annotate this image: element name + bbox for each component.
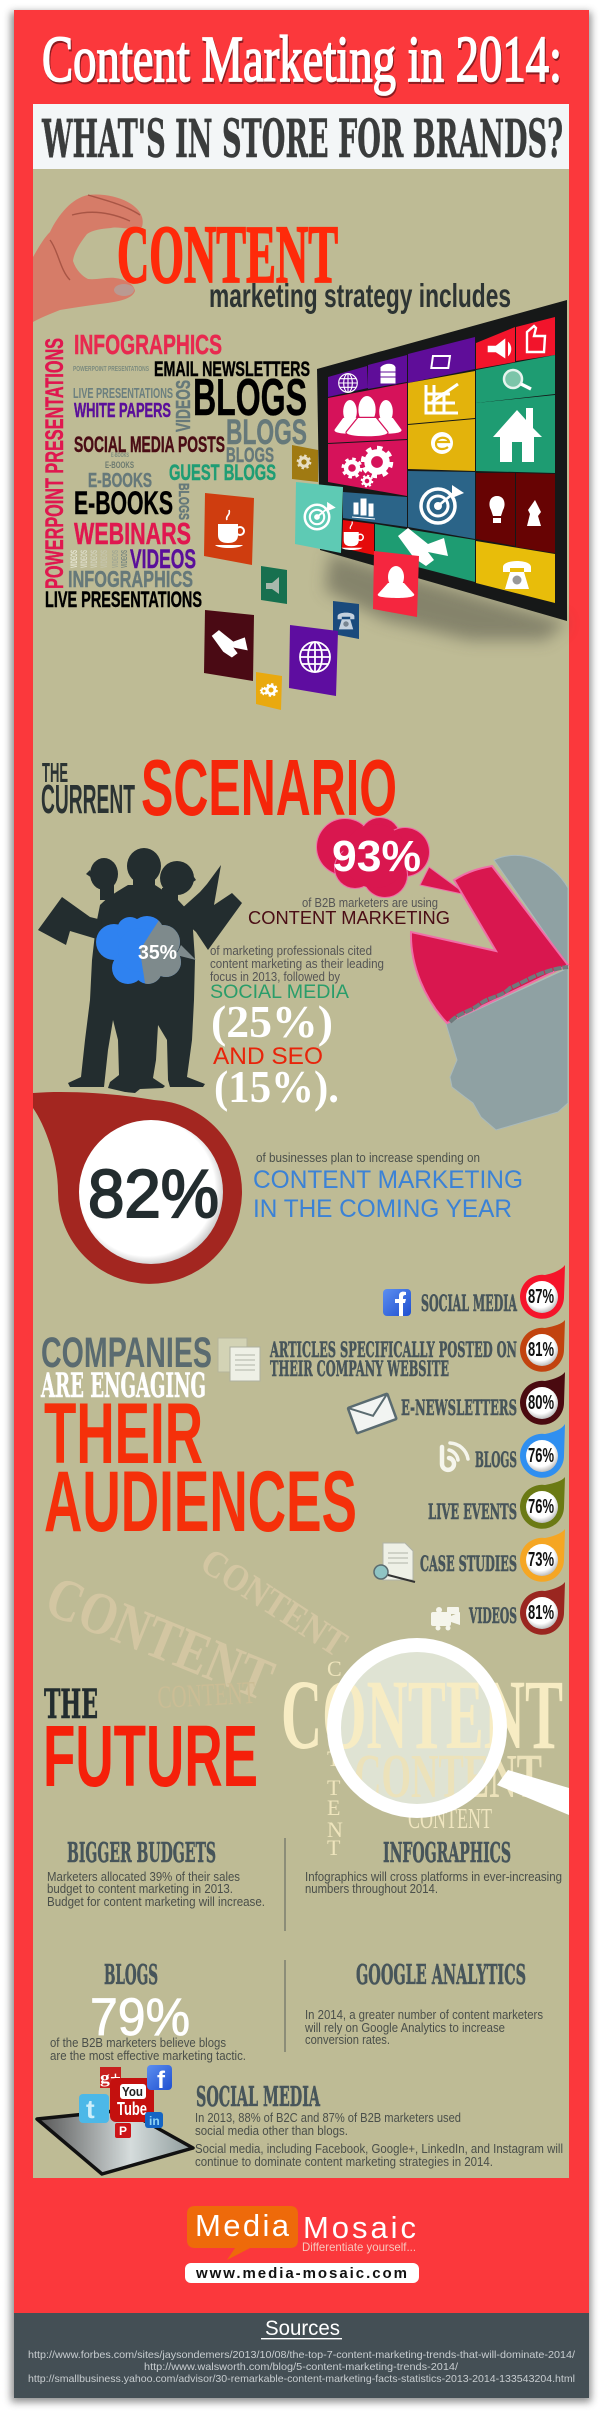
watermark words: T [327,1746,341,1771]
word cloud: WEBINARS [74,516,191,551]
word cloud: VIDEOS [79,550,89,568]
watermark words: E [327,1795,340,1820]
block: blogs [50,1960,246,2063]
block: blogs: BLOGS [104,1960,158,1991]
word cloud: LIVE PRESENTATIONS [73,385,173,402]
word cloud: VIDEOS [89,550,99,568]
icon: podium [352,499,375,519]
block: infographics [305,1838,562,1896]
icon: envelope [348,1394,397,1433]
icon: youtube: Tube [117,2099,147,2119]
text: leading focus: (15%). [214,1061,339,1112]
watermark words: N [327,1817,343,1842]
heading: companies are engaging their audiences: THEIR [44,1386,203,1482]
word cloud: INFOGRAPHICS [74,329,222,360]
block: bigger budgets [47,1838,265,1909]
word cloud: WHITE PAPERS [74,400,171,422]
word cloud: GUEST BLOGS [169,460,276,485]
monitor with tiles [317,300,567,621]
word cloud: BLOGS [226,444,274,467]
block: infographics: numbers throughout 2014. [305,1881,438,1896]
heading: companies are engaging their audiences [40,1329,357,1550]
watermark words: CONTENT [408,1804,492,1835]
row: blogs 76%: BLOGS [475,1447,517,1472]
icon: handshake [398,528,448,566]
watermark words: T [327,1835,341,1860]
text: B2B marketers: of B2B marketers are using [302,896,438,910]
row: social media 87%: 87% [528,1286,554,1308]
text: B2B marketers: CONTENT MARKETING [248,907,450,928]
row: live events 76% [428,1477,565,1529]
word cloud: SOCIAL MEDIA POSTS [74,432,225,457]
source links [28,2349,575,2385]
block: bigger budgets: BIGGER BUDGETS [67,1838,216,1869]
heading: companies are engaging their audiences: ARE ENGAGING [40,1366,206,1406]
text: spending [253,1150,523,1223]
block: bigger budgets: Marketers allocated 39% of their sales [47,1869,240,1884]
icon: gears [343,448,391,486]
icon: facebook [147,2065,172,2094]
watermark words [37,1540,563,1860]
text: spending: IN THE COMING YEAR [253,1195,512,1223]
icon: window [431,356,450,368]
icon: bulb [489,496,505,523]
head with pie chart [411,855,568,1130]
block: google analytics: conversion rates. [305,2032,390,2047]
subtitle banner [33,104,569,170]
block: google analytics [304,1960,543,2047]
drop: 82% [33,1092,242,1284]
illustration: tablet with social icons [37,2065,193,2174]
row: videos 81%: VIDEOS [468,1603,517,1628]
icon: twitter: t [86,2094,95,2124]
section: content intro [33,195,511,322]
block: social media: In 2013, 88% of B2C and 87% of B2B marketers used [195,2110,461,2125]
watermark words: CONTENT [193,1540,354,1665]
icon: cup [342,522,363,550]
icon: documents [218,1338,260,1381]
word cloud: E-BOOKS [88,470,152,492]
word cloud: EMAIL NEWSLETTERS [154,358,310,381]
word cloud: VIDEOS [120,550,129,568]
magnifying glass frame [334,1645,569,1815]
row: case studies 73% [374,1529,565,1582]
icon: chess knight [527,500,541,526]
block: social media [195,2082,563,2169]
logo: media mosaic: www.media-mosaic.com [195,2265,407,2282]
row: blogs 76% [442,1424,565,1478]
block: blogs: of the B2B marketers believe blogs [50,2035,226,2050]
word cloud: BLOGS [226,413,307,452]
cloud: 35% [96,916,196,984]
icon: speaker [488,339,511,358]
logo: media mosaic: Mosaic [303,2210,416,2245]
block: social media: SOCIAL MEDIA [196,2082,321,2113]
block: blogs: are the most effective marketing tactic. [50,2048,246,2063]
block: infographics: Infographics will cross platforms in ever-increasing [305,1869,562,1884]
logo: media mosaic: Media [195,2208,290,2243]
word cloud: E-BOOKS [111,453,129,459]
heading: the future: THE [44,1681,98,1728]
word cloud: E-BOOKS [105,460,134,470]
icon: magnifier [504,370,531,389]
word cloud: BLOGS [175,483,192,520]
text: leading focus: (25%) [211,996,333,1047]
row: e-newsletters 80%: 80% [528,1392,554,1414]
text: leading focus: AND SEO [213,1043,323,1070]
block: bigger budgets: Budget for content marketing will increase. [47,1894,265,1909]
heading: companies are engaging their audiences: AUDIENCES [44,1454,357,1550]
icon: target [421,485,464,523]
panel: sources [14,2313,589,2398]
bubble: 93% [317,818,467,897]
row: case studies 73%: CASE STUDIES [420,1551,517,1576]
monitor shadow [325,553,567,640]
block: blogs: 79% [90,1988,190,2047]
icon: video camera [431,1607,460,1630]
source links: http://www.forbes.com/sites/jaysondemers/2013/10/08/the-top-7-content-marketing-trends-that-will-dominate-2014/ [28,2349,575,2361]
word cloud: VIDEOS [111,550,120,568]
word cloud: INFOGRAPHICS [68,566,193,592]
row: videos 81%: 81% [528,1602,554,1624]
row: articles 81%: 81% [528,1339,554,1361]
text: spending: CONTENT MARKETING [253,1166,523,1194]
icon: people [334,395,402,437]
word cloud: VIDEOS [173,380,195,432]
logo: media mosaic: Differentiate yourself... [302,2240,416,2254]
row: social media 87% [383,1265,565,1319]
text: leading focus: of marketing professionals cited [210,944,372,958]
magnifier lens [339,1650,495,1806]
icon: linkedin [145,2112,163,2128]
block: google analytics: In 2014, a greater number of content marketers [305,2007,543,2022]
block: social media: continue to dominate content marketing strategies in 2014. [195,2154,493,2169]
icon: stacked device [380,363,396,384]
heading: the future: FUTURE [43,1708,258,1805]
icon: pinterest [115,2123,131,2138]
icon: document with magnifier [374,1543,415,1582]
word cloud: E-BOOKS [74,485,173,521]
row: e-newsletters 80% [348,1372,565,1433]
heading: CONTENT: CONTENT [117,208,338,300]
icon: letter e [431,432,453,454]
text: spending: of businesses plan to increase spending on [256,1150,480,1165]
cloud: 35%: 35% [138,942,177,964]
row: live events 76%: LIVE EVENTS [428,1499,517,1524]
text: leading focus [210,944,384,1112]
heading: companies are engaging their audiences: COMPANIES [41,1329,212,1377]
block: google analytics: will rely on Google Analytics to increase [304,2020,505,2035]
text: leading focus: SOCIAL MEDIA [210,982,349,1003]
icon: blog feed [442,1443,468,1470]
word cloud: BLOGS [193,369,307,427]
icon: linkedin: in [149,2114,160,2128]
text: leading focus: content marketing as their leading [210,957,384,971]
icon: small globe [339,374,357,392]
icon: facebook [383,1289,411,1316]
word cloud [41,329,310,612]
word cloud: VIDEOS [99,550,109,568]
icon: hand [33,195,143,322]
icon: telephone [503,561,531,589]
word cloud: VIDEOS [130,544,196,574]
word cloud: POWERPOINT PRESENTATIONS [73,366,149,373]
block: bigger budgets: budget to content marketing in 2013. [47,1881,233,1896]
icon: chart cart [426,384,458,413]
icon: youtube: You [122,2084,143,2099]
word cloud: VIDEOS [69,550,79,568]
beige content panel [33,169,569,2178]
logo: media mosaic [185,2206,419,2283]
silhouette: three men [38,848,242,1093]
source links: http://www.walsworth.com/blog/5-content-marketing-trends-2014/ [144,2361,458,2373]
row: articles 81% [218,1320,565,1381]
floating tiles [204,445,419,710]
row: live events 76%: 76% [528,1496,554,1518]
drop: 82%: 82% [88,1156,219,1232]
word cloud: LIVE PRESENTATIONS [45,587,202,612]
text: B2B marketers [248,896,450,928]
row: videos 81% [431,1582,565,1635]
block: social media: social media other than blogs. [195,2123,348,2138]
icon: house [493,408,542,462]
icon: pinterest: P [119,2124,127,2138]
icon: google plus: g+ [100,2068,121,2087]
heading: the future [43,1681,258,1805]
watermark words: C [327,1656,342,1681]
watermark words: CONTENT [156,1674,257,1715]
icon: facebook: f [157,2067,166,2094]
icon: thumbs up [527,326,545,352]
watermark words: CONTENT [37,1563,283,1713]
sources heading: Sources [265,2317,340,2340]
bubble: 93%: 93% [332,832,421,881]
heading: the current scenario: CURRENT [41,776,135,822]
icon: youtube [110,2078,154,2122]
text: leading focus: focus in 2013, followed by [210,970,341,984]
row: case studies 73%: 73% [528,1549,554,1571]
watermark words: T [327,1775,341,1800]
heading: the current scenario [41,743,397,832]
heading: the current scenario: THE [42,757,68,788]
source links: http://smallbusiness.yahoo.com/advisor/30-remarkable-content-marketing-facts-statistics-2013-2014-133543204.html [28,2373,575,2385]
heading: the current scenario: SCENARIO [141,743,397,832]
row: articles 81%: THEIR COMPANY WEBSITE [270,1356,449,1381]
word cloud: POWERPOINT PRESENTATIONS [41,338,69,589]
row: blogs 76%: 76% [528,1445,554,1467]
icon: twitter [79,2094,109,2124]
